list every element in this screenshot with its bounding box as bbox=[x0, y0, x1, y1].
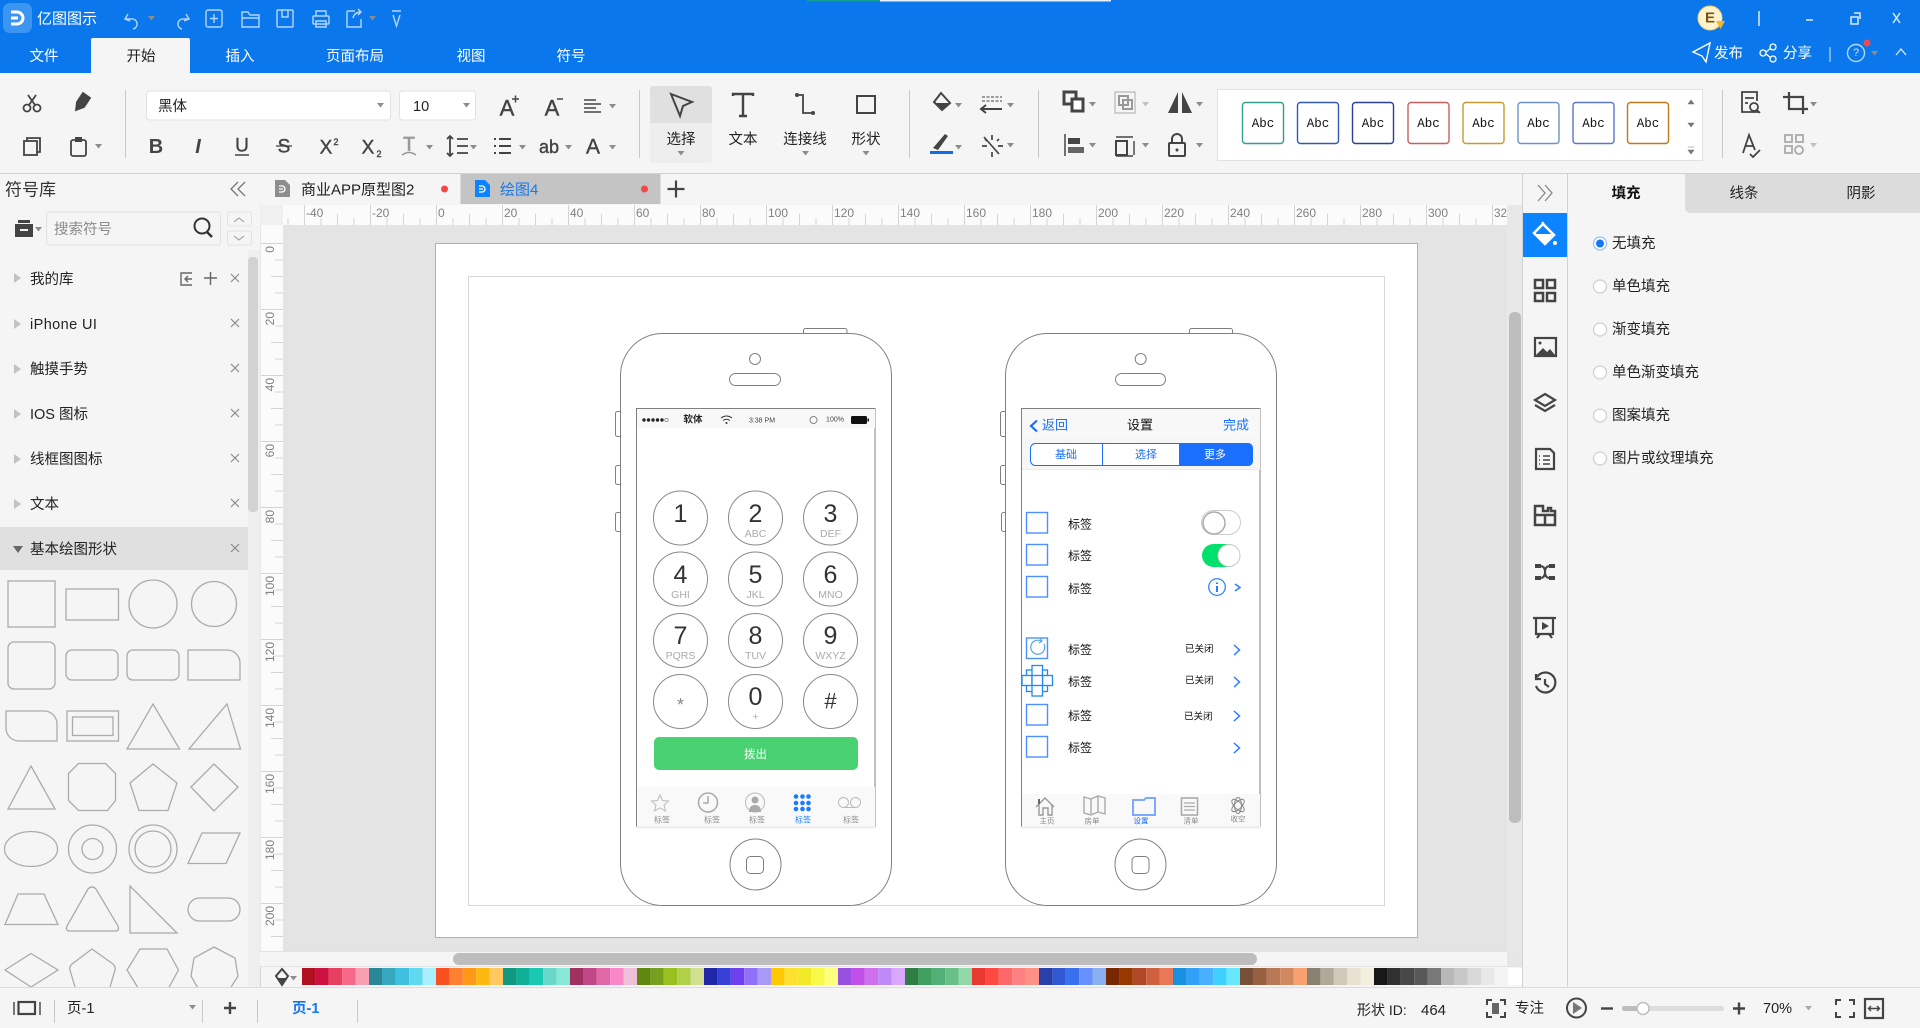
segmented control: 基础 bbox=[1055, 448, 1077, 461]
menu tabs: 符号 bbox=[556, 48, 586, 65]
library list: IOS 图标 bbox=[30, 406, 88, 423]
status bar: 3:38 PM bbox=[749, 418, 775, 424]
top ruler: 280 bbox=[1362, 206, 1382, 220]
keypad: # bbox=[824, 688, 837, 714]
icon: puzzle bbox=[1535, 506, 1555, 525]
settings rows: 标签 bbox=[1068, 642, 1092, 657]
icon: page view bbox=[14, 1002, 40, 1015]
keypad: * bbox=[677, 695, 684, 715]
status bar: 软体 bbox=[683, 414, 703, 426]
style gallery: Abc bbox=[1362, 117, 1384, 131]
scrollbar bbox=[248, 257, 258, 512]
select tool: 选择 bbox=[666, 131, 696, 148]
tab bar: 标签 bbox=[654, 814, 670, 824]
publish and share: 分享 bbox=[1783, 45, 1812, 62]
add page bbox=[224, 1002, 236, 1014]
left ruler: 0 bbox=[263, 246, 277, 253]
page selector: 页-1 bbox=[67, 1001, 94, 1017]
icon: document list bbox=[1536, 449, 1554, 469]
top ruler: 140 bbox=[900, 206, 920, 220]
menu tabs: 插入 bbox=[226, 48, 254, 65]
settings rows: 已关闭 bbox=[1185, 643, 1214, 655]
style gallery: Abc bbox=[1417, 117, 1440, 131]
text tool bbox=[728, 94, 758, 148]
phone: settings screen bbox=[1000, 328, 1276, 906]
icon: layers bbox=[1535, 394, 1555, 411]
left ruler: 120 bbox=[263, 642, 277, 662]
document tabs bbox=[260, 174, 1523, 204]
fill options: 单色填充 bbox=[1612, 278, 1670, 295]
ribbon toolbar bbox=[0, 86, 1920, 174]
text format icons: X bbox=[362, 138, 375, 158]
tab bar: 收空 bbox=[1230, 814, 1246, 824]
icon: mind map bbox=[1535, 564, 1555, 580]
icon: fill active bbox=[1523, 213, 1567, 257]
top ruler: 240 bbox=[1230, 206, 1250, 220]
keypad: 8 bbox=[749, 622, 762, 650]
tab: prototype document: 商业APP原型图2 bbox=[301, 182, 414, 198]
phone body bbox=[1000, 328, 1276, 906]
keypad: 6 bbox=[824, 561, 837, 589]
keypad: 1 bbox=[674, 500, 687, 528]
top ruler: 40 bbox=[570, 206, 584, 220]
keypad: PQRS bbox=[666, 650, 695, 662]
shape id: 形状 ID: bbox=[1357, 1002, 1407, 1018]
text format icons bbox=[149, 96, 616, 159]
left ruler: 60 bbox=[263, 444, 277, 457]
search row bbox=[15, 212, 252, 245]
panel: symbol library bbox=[0, 174, 260, 994]
colour palette bbox=[276, 968, 1522, 985]
left ruler: 180 bbox=[263, 840, 277, 860]
settings rows: 标签 bbox=[1068, 674, 1092, 689]
zoom slider: 70% bbox=[1763, 1001, 1792, 1017]
call button: 拨出 bbox=[744, 747, 767, 761]
keypad: DEF bbox=[820, 528, 841, 540]
library list: 文本 bbox=[30, 496, 59, 513]
keypad: 0 bbox=[749, 683, 762, 711]
icon: presentation bbox=[1533, 618, 1556, 638]
top ruler: 200 bbox=[1098, 206, 1118, 220]
settings rows bbox=[1022, 510, 1240, 757]
segmented control: 选择 bbox=[1135, 447, 1157, 461]
keypad: 3 bbox=[824, 500, 837, 528]
library list bbox=[0, 271, 248, 570]
text format icons: A bbox=[545, 96, 560, 120]
arrange icons bbox=[1064, 92, 1203, 156]
user avatar: E bbox=[1705, 10, 1715, 26]
top ruler: 80 bbox=[702, 206, 716, 220]
navigation header bbox=[1022, 409, 1260, 438]
left ruler: 40 bbox=[263, 378, 277, 391]
segmented control: 更多 bbox=[1204, 447, 1226, 461]
keypad: JKL bbox=[746, 589, 765, 601]
window controls bbox=[1759, 11, 1900, 26]
select tool bbox=[650, 86, 712, 163]
icon: history bbox=[1536, 672, 1555, 692]
drawing page bbox=[436, 244, 1418, 938]
style gallery: Abc bbox=[1582, 117, 1605, 131]
style gallery bbox=[1218, 90, 1702, 160]
keypad: 5 bbox=[749, 561, 762, 589]
active page: 页-1 bbox=[292, 1001, 319, 1017]
add tab button bbox=[668, 180, 684, 198]
text format icons: X bbox=[320, 138, 333, 158]
fill and line icons bbox=[930, 93, 1014, 157]
text format icons: U bbox=[235, 136, 249, 156]
navigation header: 返回 bbox=[1042, 418, 1068, 432]
font family box: 黑体 bbox=[158, 98, 187, 115]
horizontal scrollbar bbox=[260, 951, 1523, 966]
fill options: 渐变填充 bbox=[1612, 321, 1670, 338]
keypad: 9 bbox=[824, 622, 837, 650]
top ruler: 300 bbox=[1428, 206, 1448, 220]
icon: grid bbox=[1535, 280, 1555, 301]
top ruler: 100 bbox=[768, 206, 788, 220]
tab bar: 标签 bbox=[795, 814, 811, 824]
text format icons: A bbox=[586, 136, 600, 158]
connector tool: 连接线 bbox=[783, 131, 827, 148]
fill options bbox=[1594, 235, 1714, 467]
tab bar: 标签 bbox=[843, 814, 859, 824]
keypad: MNO bbox=[818, 589, 843, 601]
title bar bbox=[0, 0, 1920, 73]
menu tabs bbox=[30, 38, 586, 73]
keypad bbox=[654, 491, 858, 728]
left ruler: 100 bbox=[263, 576, 277, 596]
left ruler bbox=[260, 225, 283, 951]
tab bar: 主页 bbox=[1040, 816, 1055, 826]
text tool: 文本 bbox=[728, 131, 758, 148]
menu tabs: 页面布局 bbox=[326, 48, 384, 65]
segmented control bbox=[1022, 438, 1260, 470]
style gallery: Abc bbox=[1637, 117, 1659, 131]
publish and share bbox=[1693, 40, 1906, 62]
view fit icons bbox=[1836, 999, 1883, 1018]
library list: 基本绘图形状 bbox=[30, 541, 117, 558]
page selector bbox=[67, 1001, 196, 1017]
library list: 线框图图标 bbox=[30, 451, 102, 468]
keypad: TUV bbox=[745, 650, 766, 662]
top ruler: -40 bbox=[306, 206, 324, 220]
settings rows: 标签 bbox=[1068, 516, 1092, 532]
keypad: 4 bbox=[674, 561, 688, 589]
play button bbox=[1567, 998, 1586, 1018]
tab: active drawing bbox=[460, 174, 660, 204]
top ruler: 120 bbox=[834, 206, 854, 220]
focus mode bbox=[1487, 1000, 1544, 1017]
font size box bbox=[400, 91, 476, 120]
clipboard icons bbox=[24, 93, 90, 156]
keypad: + bbox=[752, 711, 759, 723]
info icon bbox=[1209, 579, 1225, 595]
shape tool bbox=[852, 96, 881, 156]
basic shapes grid bbox=[4, 580, 240, 994]
keypad: 2 bbox=[749, 500, 762, 528]
top ruler: 180 bbox=[1032, 206, 1052, 220]
navigation header: 设置 bbox=[1127, 418, 1153, 432]
top ruler: 260 bbox=[1296, 206, 1316, 220]
text format icons: S bbox=[278, 136, 290, 158]
left ruler: 140 bbox=[263, 708, 277, 728]
shape id: 464 bbox=[1421, 1002, 1446, 1018]
tab bar: 标签 bbox=[749, 814, 765, 824]
text format icons: A bbox=[500, 96, 515, 120]
vertical scrollbar bbox=[1507, 205, 1523, 951]
top ruler: 0 bbox=[438, 206, 445, 220]
text format icons: ab bbox=[539, 137, 559, 157]
text format icons: B bbox=[149, 136, 163, 158]
settings rows: 已关闭 bbox=[1185, 674, 1214, 686]
top ruler: 220 bbox=[1164, 206, 1184, 220]
status bar bbox=[0, 987, 1920, 1028]
style gallery: Abc bbox=[1252, 117, 1274, 131]
collapse arrows bbox=[231, 182, 245, 196]
canvas area bbox=[283, 205, 1523, 951]
symbol library heading: 符号库 bbox=[5, 180, 56, 200]
quick access icons bbox=[125, 9, 401, 29]
tab bar bbox=[1021, 794, 1260, 828]
icon: fill colour bbox=[276, 969, 297, 985]
property tabs: 线条 bbox=[1730, 185, 1758, 202]
call button bbox=[654, 737, 858, 770]
status bar bbox=[637, 409, 875, 428]
fill options: 无填充 bbox=[1612, 235, 1656, 252]
left ruler: 20 bbox=[263, 312, 277, 325]
tab bar: 设置 bbox=[1134, 816, 1149, 826]
keypad: WXYZ bbox=[815, 650, 846, 662]
menu tabs: 视图 bbox=[456, 48, 486, 65]
tab bar: 清单 bbox=[1184, 816, 1199, 826]
icon sidebar bbox=[1522, 174, 1568, 987]
left ruler: 200 bbox=[263, 906, 277, 926]
toggle off bbox=[1202, 510, 1240, 534]
top ruler: -20 bbox=[372, 206, 390, 220]
menu tabs: 文件 bbox=[30, 48, 58, 65]
focus mode: 专注 bbox=[1515, 1000, 1544, 1017]
search row: 搜索符号 bbox=[54, 221, 112, 238]
library list: 触摸手势 bbox=[30, 361, 88, 378]
settings rows: 标签 bbox=[1068, 581, 1092, 596]
property tabs: 填充 bbox=[1612, 184, 1641, 202]
navigation header: 完成 bbox=[1223, 418, 1249, 432]
fill options: 图片或纹理填充 bbox=[1612, 450, 1714, 467]
tab bar: 房单 bbox=[1084, 816, 1100, 826]
style gallery: Abc bbox=[1472, 117, 1495, 131]
keypad: GHI bbox=[671, 589, 690, 601]
toggle on bbox=[1202, 544, 1240, 567]
text format icons: 2 bbox=[333, 137, 339, 147]
zoom slider bbox=[1601, 1001, 1812, 1017]
tab: prototype document bbox=[275, 180, 448, 198]
connector tool bbox=[783, 93, 827, 156]
expand arrows bbox=[1538, 185, 1552, 201]
keypad: 7 bbox=[674, 622, 687, 650]
settings rows: 标签 bbox=[1068, 548, 1092, 563]
phone body bbox=[616, 328, 892, 906]
menu tabs: 开始 bbox=[126, 48, 156, 65]
app name: 亿图图示 bbox=[37, 10, 97, 28]
text format icons: T bbox=[403, 134, 415, 156]
phone: dial pad bbox=[616, 328, 892, 906]
text format icons: I bbox=[195, 136, 201, 158]
property tabs bbox=[1612, 174, 1920, 213]
fill options: 单色渐变填充 bbox=[1612, 364, 1699, 381]
right ribbon icons bbox=[1742, 92, 1808, 157]
settings rows: 已关闭 bbox=[1184, 710, 1213, 722]
icon: app logo bbox=[3, 3, 32, 33]
property tabs: 阴影 bbox=[1846, 185, 1876, 202]
top ruler: 60 bbox=[636, 206, 650, 220]
tab bar bbox=[636, 787, 876, 828]
panel: fill properties bbox=[1568, 174, 1920, 987]
top ruler: 20 bbox=[504, 206, 518, 220]
publish and share: ? bbox=[1853, 47, 1859, 59]
settings rows: 标签 bbox=[1068, 740, 1092, 755]
left ruler: 160 bbox=[263, 774, 277, 794]
user avatar bbox=[1698, 6, 1725, 30]
selected cross icon bbox=[1022, 666, 1052, 696]
library list: 我的库 bbox=[30, 271, 74, 288]
keypad: ABC bbox=[745, 528, 767, 540]
tab: active drawing: 绘图4 bbox=[500, 182, 538, 198]
status bar: 100% bbox=[826, 416, 844, 424]
top ruler: 160 bbox=[966, 206, 986, 220]
tab bar: 标签 bbox=[704, 814, 720, 824]
icon: picture bbox=[1535, 338, 1556, 356]
left ruler: 80 bbox=[263, 510, 277, 523]
text format icons: 2 bbox=[376, 149, 382, 159]
font size box: 10 bbox=[413, 99, 429, 115]
style gallery: Abc bbox=[1527, 117, 1550, 131]
fill options: 图案填充 bbox=[1612, 406, 1670, 424]
settings rows: 标签 bbox=[1068, 708, 1092, 723]
library list: iPhone UI bbox=[30, 317, 97, 333]
top ruler: 32 bbox=[1494, 206, 1507, 220]
font family box bbox=[146, 91, 390, 120]
top ruler bbox=[260, 205, 1507, 225]
shape tool: 形状 bbox=[852, 131, 881, 148]
publish and share: 发布 bbox=[1714, 45, 1743, 62]
style gallery: Abc bbox=[1307, 117, 1329, 131]
